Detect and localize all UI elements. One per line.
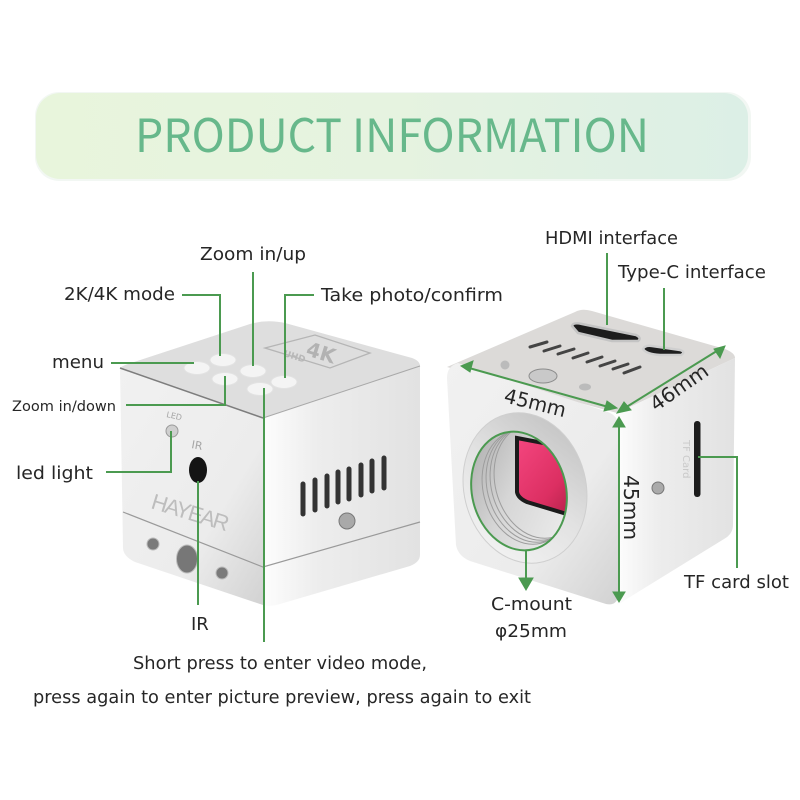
45mm height arrow: [618, 420, 620, 598]
label: zoom in/up: Zoom in/up: [200, 244, 306, 265]
front face: [120, 368, 263, 605]
IR line: [197, 481, 199, 605]
HDMI line: [606, 253, 608, 325]
4K badge: 4K: [304, 337, 340, 369]
labels: [12, 228, 789, 708]
zoom in/up line: [252, 272, 254, 366]
label: width 45mm: 45mm: [502, 384, 569, 422]
left camera: LED: [166, 410, 183, 422]
label: IR: IR: [191, 614, 209, 635]
take photo line: [285, 295, 314, 378]
right face: [263, 366, 420, 606]
4K badge: UHD: [282, 349, 306, 365]
side screw: [652, 482, 664, 494]
video mode line: [263, 388, 265, 642]
IR hole: [189, 457, 207, 483]
title: PRODUCT INFORMATION: [135, 100, 649, 166]
menu line: [111, 362, 194, 364]
C-mount line: [525, 551, 527, 585]
buttons: [184, 354, 297, 396]
callouts right: [526, 253, 737, 585]
label: press instructions: Short press to enter video mode,: [133, 653, 427, 674]
label: Type-C: Type-C interface: [617, 262, 766, 283]
led line: [106, 431, 171, 472]
label: zoom down: Zoom in/down: [12, 399, 116, 415]
lens ring: [447, 400, 603, 576]
label: C-mount: C-mount: [491, 594, 572, 615]
left camera: [120, 321, 420, 606]
label: menu: menu: [52, 352, 104, 373]
led: [166, 425, 178, 437]
label: height 45mm: 45mm: [619, 475, 643, 540]
screws: [147, 538, 159, 550]
brand: HAYEAR: [149, 489, 232, 536]
side face: [617, 358, 735, 605]
label: depth 46mm: 46mm: [645, 359, 713, 416]
HDMI port: [572, 323, 640, 341]
label: led light: led light: [16, 463, 93, 484]
lens outline: [459, 421, 579, 561]
zoom down line: [126, 376, 225, 405]
4K badge: [265, 335, 370, 369]
label: press instructions line 2: press again to enter picture preview, press again to exit: [33, 687, 531, 708]
label: HDMI: HDMI interface: [545, 228, 678, 249]
vents: [303, 458, 384, 514]
right camera: [447, 310, 735, 605]
2K/4K mode line: [182, 295, 220, 356]
front face: [447, 363, 618, 604]
top face: [447, 310, 735, 413]
Type-C line: [663, 288, 665, 350]
lens opening: [459, 421, 579, 561]
C-mount arrow head: [519, 578, 533, 590]
top face: [120, 321, 420, 418]
Type-C port: [643, 346, 683, 355]
card slot: [694, 421, 700, 497]
label: TF card slot: TF card slot: [683, 572, 789, 593]
sensor: [515, 436, 566, 516]
top vents: [530, 342, 640, 373]
header banner: [35, 92, 751, 181]
TF card line: [698, 457, 737, 568]
right camera: TF Card: [680, 439, 691, 478]
45mm width arrow: [462, 366, 612, 408]
dimension arrows: [461, 346, 725, 602]
threads: [482, 432, 552, 545]
label: take photo: Take photo/confirm: [320, 285, 503, 306]
label: 2K/4K mode: 2K/4K mode: [64, 284, 175, 305]
label: 25mm: φ25mm: [495, 621, 567, 642]
46mm depth arrow: [620, 349, 720, 411]
callouts left: [106, 272, 314, 642]
left camera: IR: [190, 438, 204, 453]
